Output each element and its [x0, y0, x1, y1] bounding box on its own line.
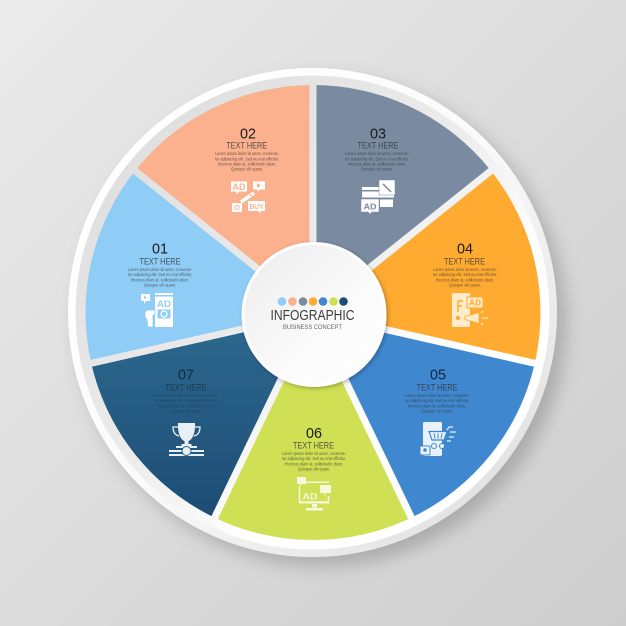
icon: ad cards and key: AD [364, 202, 376, 212]
icon: monitor with ad: AD [302, 492, 318, 502]
segment 02: peach: Quisque elit quam. [231, 166, 263, 172]
segment 03: slate: rhoncus diam at, sollicitudin diam. [348, 162, 406, 166]
segment 03: slate: Lorem ipsum dolor sit amet, consecte- [345, 151, 409, 156]
icon: ad cards and key [361, 180, 395, 214]
icon: ad and buy bubbles: AD [232, 182, 246, 192]
segment 03: slate: TEXT HERE [358, 140, 398, 150]
segment 07: dark blue: Quisque elit quam. [170, 408, 202, 414]
segment 07: dark blue: TEXT HERE [166, 382, 206, 392]
colored dots [278, 297, 348, 306]
center circle [243, 244, 385, 386]
segment 04: orange: Lorem ipsum dolor sit amet, consecte- [433, 267, 497, 272]
segment 01: light blue: Lorem ipsum dolor sit amet, consecte- [128, 267, 192, 272]
segment 02: peach: Lorem ipsum dolor sit amet, consecte- [215, 151, 279, 156]
segment 01: light blue: Quisque elit quam. [144, 282, 176, 288]
segment 06: lime: tur adipiscing elit. Sed eu erat efficitur, [282, 456, 346, 461]
segment 02: peach: tur adipiscing elit. Sed eu erat efficitur, [215, 156, 279, 161]
segment 04: orange: rhoncus diam at, sollicitudin diam. [436, 277, 494, 282]
segment 03: slate: Quisque elit quam. [361, 166, 393, 172]
segment gaps [86, 80, 540, 523]
segment 07: dark blue: 07 [178, 367, 194, 384]
segment 06: lime: Lorem ipsum dolor sit amet, consecte- [282, 451, 346, 456]
segment 01: light blue: rhoncus diam at, sollicitudin diam. [131, 277, 189, 282]
segment 05: blue: 05 [430, 367, 446, 384]
segment 02: peach: rhoncus diam at, sollicitudin diam. [218, 162, 276, 166]
segment 07: dark blue: tur adipiscing elit. Sed eu erat efficitur, [154, 398, 218, 403]
segment 05: blue [313, 312, 535, 518]
segment 03: slate: tur adipiscing elit. Sed eu erat efficitur, [345, 156, 409, 161]
segment 01: light blue [86, 171, 313, 363]
inner disc [76, 76, 550, 550]
icon: ad and buy bubbles: BUY [250, 202, 264, 211]
segment 01: light blue: 01 [152, 240, 168, 257]
outer ring [68, 68, 557, 557]
icon: trophy [169, 423, 204, 456]
icon: phone ad megaphone [452, 293, 488, 327]
segment 04: orange [313, 171, 540, 363]
center title: INFOGRAPHIC [270, 308, 354, 324]
segment 05: blue: rhoncus diam at, sollicitudin diam. [408, 403, 466, 408]
icon: phone ad search: AD [157, 299, 172, 309]
segment 04: orange: TEXT HERE [444, 256, 485, 266]
center subtitle: BUSINESS CONCEPT [283, 324, 342, 331]
icon: phone shopping cart [420, 422, 456, 456]
segment 05: blue: TEXT HERE [416, 382, 458, 392]
segment 07: dark blue: Lorem ipsum dolor sit amet, consecte- [154, 393, 218, 398]
segment 06: lime: 06 [306, 425, 322, 442]
segment 01: light blue: tur adipiscing elit. Sed eu erat efficitur, [128, 272, 192, 277]
segment 06: lime: Quisque elit quam. [298, 466, 330, 472]
segment 06: lime: TEXT HERE [293, 440, 334, 450]
segment 02: peach: TEXT HERE [226, 140, 267, 150]
segment 06: lime: rhoncus diam at, sollicitudin diam. [285, 461, 343, 466]
icon: monitor with ad [297, 477, 331, 510]
segment 07: dark blue [91, 312, 313, 518]
segment 02: peach: 02 [240, 125, 256, 142]
segment 07: dark blue: rhoncus diam at, sollicitudin diam. [157, 403, 215, 408]
segment 04: orange: 04 [457, 240, 473, 257]
segment 01: light blue: TEXT HERE [140, 256, 180, 266]
segment 05: blue: tur adipiscing elit. Sed eu erat efficitur, [405, 398, 469, 403]
icon: phone ad search [141, 293, 173, 327]
segment 04: orange: tur adipiscing elit. Sed eu erat efficitur, [433, 272, 497, 277]
icon: ad and buy bubbles [231, 182, 265, 213]
segment 06: lime [214, 312, 412, 540]
segment 03: slate: 03 [370, 125, 386, 142]
segment 05: blue: Quisque elit quam. [421, 408, 453, 414]
segment 05: blue: Lorem ipsum dolor sit amet, consecte- [405, 393, 469, 398]
segment 03: slate [313, 85, 491, 312]
segment 04: orange: Quisque elit quam. [449, 282, 481, 288]
icon: phone ad megaphone: AD [469, 298, 481, 308]
segment 02: peach [135, 85, 313, 312]
